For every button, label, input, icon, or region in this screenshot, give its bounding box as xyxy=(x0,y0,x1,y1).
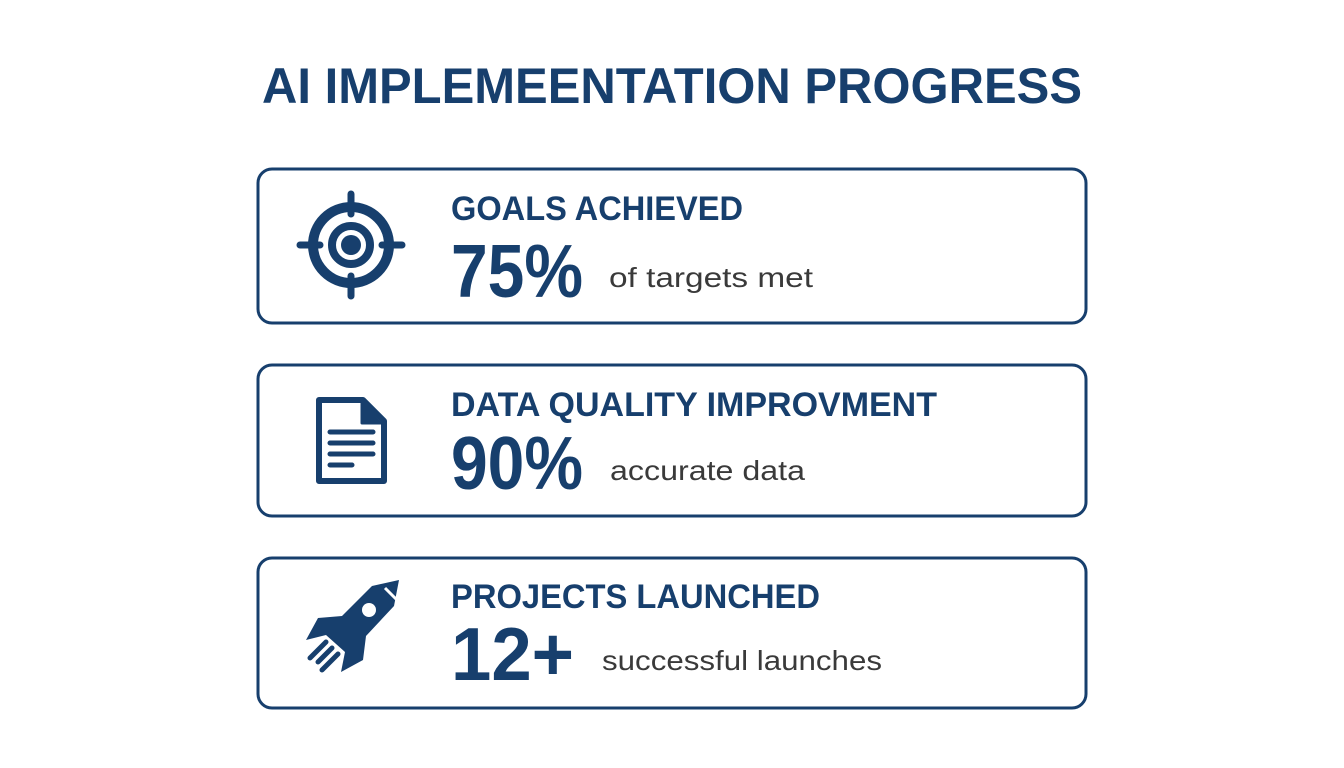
icon: target xyxy=(300,194,402,296)
stat description: of targets met xyxy=(609,262,813,293)
heading: PROJECTS LAUNCHED xyxy=(451,578,820,616)
title: AI IMPLEMEENTATION PROGRESS xyxy=(262,58,1082,114)
stat value: 75% xyxy=(451,229,583,313)
stat value: 90% xyxy=(451,421,583,505)
stat description: accurate data xyxy=(610,455,805,486)
panel: data quality xyxy=(258,365,1086,516)
stat value: 12+ xyxy=(451,612,574,696)
icon: document xyxy=(319,400,384,481)
stat description: successful launches xyxy=(602,645,882,676)
panel: goals achieved xyxy=(258,169,1086,323)
icon: rocket xyxy=(306,580,399,672)
panel: projects launched xyxy=(258,558,1086,708)
heading: GOALS ACHIEVED xyxy=(451,190,743,228)
heading: DATA QUALITY IMPROVMENT xyxy=(451,386,937,424)
